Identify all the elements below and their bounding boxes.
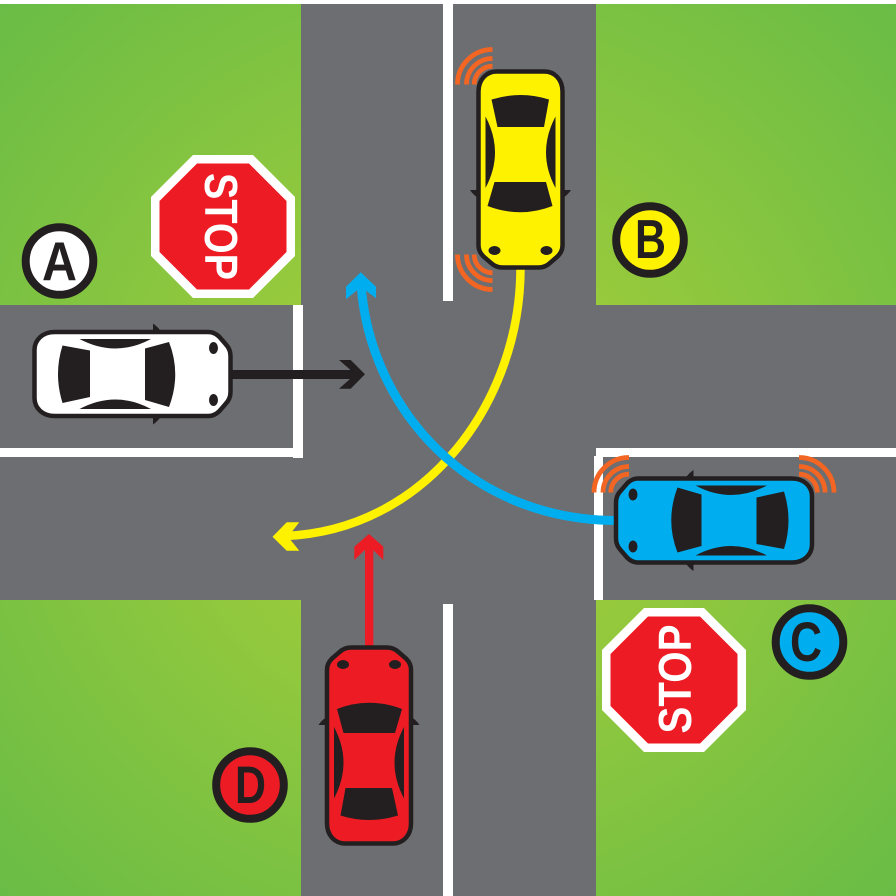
car C: blue with signal [594, 458, 834, 571]
car D: red [318, 648, 420, 844]
car B: yellow with left signal [458, 50, 571, 290]
badge B [616, 206, 684, 274]
car A: white [34, 324, 230, 424]
stop sign: top left [151, 155, 295, 298]
arrow: blue car turning right [346, 272, 616, 520]
badge D [216, 751, 284, 819]
badge B: B [635, 208, 666, 270]
badge C [776, 608, 843, 676]
arrow: red car straight [354, 534, 383, 646]
badge A [26, 227, 93, 295]
arrow: white car straight [232, 360, 365, 389]
stop sign: bottom right: STOP [649, 624, 701, 734]
badge D: D [235, 756, 266, 815]
badge A: A [42, 230, 77, 292]
stop sign: top left: STOP [195, 173, 247, 280]
arrow: yellow car turning left [272, 268, 520, 551]
stop sign: bottom right [602, 608, 746, 752]
badge C: C [790, 610, 822, 673]
